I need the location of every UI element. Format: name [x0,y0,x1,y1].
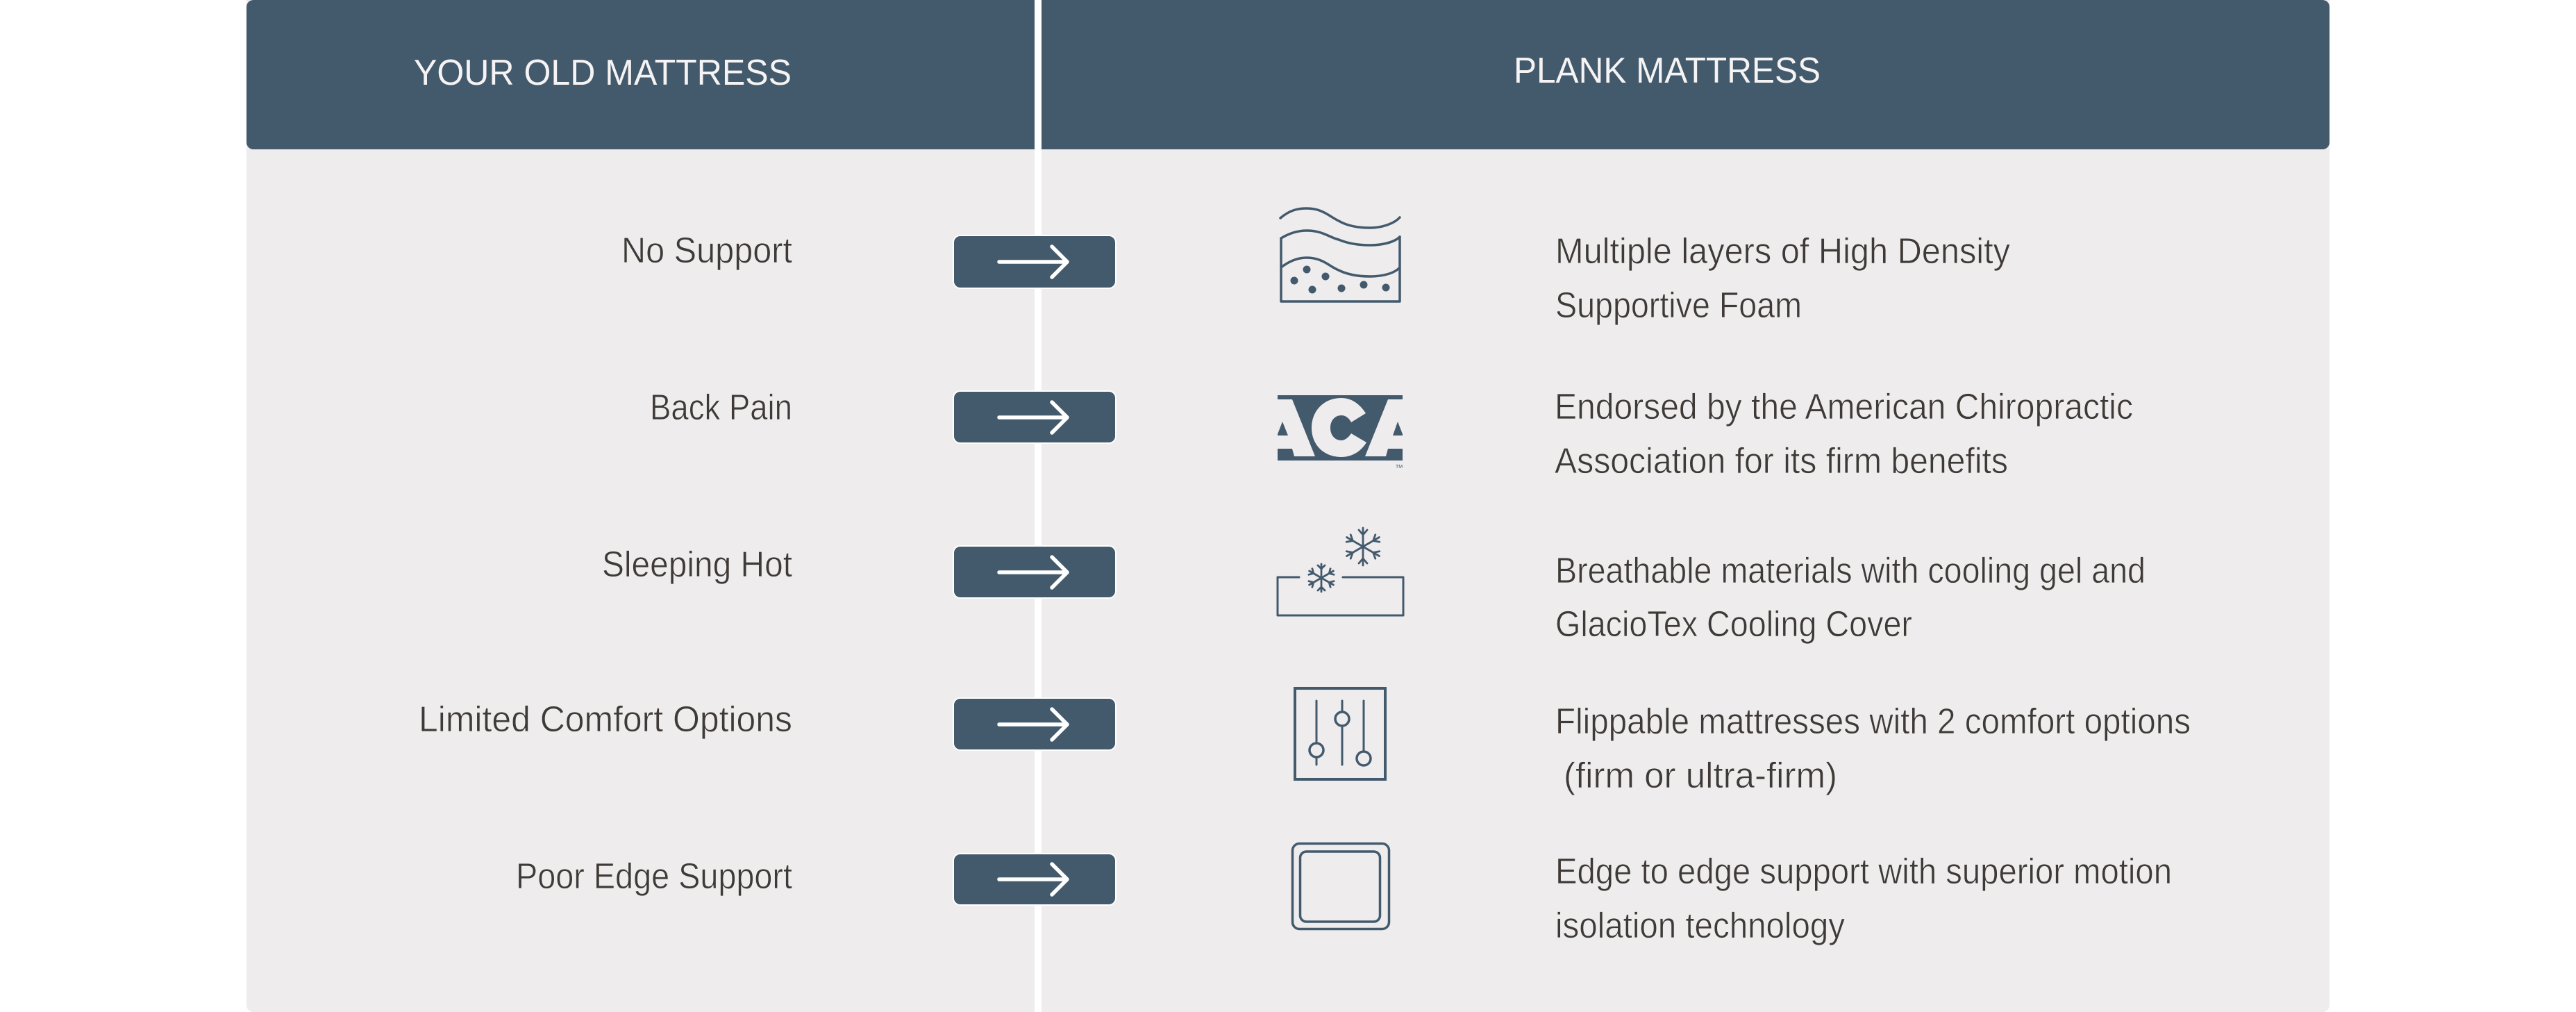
benefit text [1555,551,2146,645]
row 3: sleeping hot [602,528,2146,645]
benefit text [1555,387,2133,481]
icon: ACA logo [1278,395,1403,470]
benefit text: (firm or ultra-firm) [1564,756,1837,796]
benefit text: Endorsed by the American Chiropractic [1555,387,2133,427]
panel: header band [246,0,2330,149]
icon: cooling snowflakes [1278,528,1403,615]
benefit text: Multiple layers of High Density [1555,231,2010,272]
benefit text: isolation technology [1555,906,1845,946]
heading: plank mattress: PLANK MATTRESS [1514,51,1821,91]
benefit text: GlacioTex Cooling Cover [1555,604,1912,645]
benefit text: Supportive Foam [1555,285,1802,326]
icon: comfort sliders [1295,688,1385,779]
row 5: poor edge support [516,843,2172,946]
problem label: Back Pain [650,388,792,428]
arrow [953,235,1116,288]
arrow [953,391,1116,443]
benefit text [1555,702,2191,796]
heading: your old mattress: YOUR OLD MATTRESS [414,53,792,93]
icon: foam layers [1280,208,1400,301]
problem label: Poor Edge Support [516,856,792,897]
benefit text: Flippable mattresses with 2 comfort options [1555,702,2191,742]
benefit text [1555,231,2010,326]
arrow [953,698,1116,750]
benefit text: Association for its firm benefits [1555,441,2008,481]
icon: edge support [1293,843,1389,929]
arrow [953,854,1116,905]
problem label: No Support [621,231,793,271]
row 1: no support [621,208,2010,326]
problem label: Limited Comfort Options [419,699,792,740]
benefit text: Breathable materials with cooling gel and [1555,551,2146,591]
row 2: back pain [650,387,2133,481]
benefit text [1555,852,2172,946]
problem label: Sleeping Hot [602,545,792,585]
benefit text: Edge to edge support with superior motion [1555,852,2172,892]
row 4: limited comfort options [419,688,2191,796]
arrow [953,546,1116,598]
icon: ACA logo: TM [1396,465,1403,470]
